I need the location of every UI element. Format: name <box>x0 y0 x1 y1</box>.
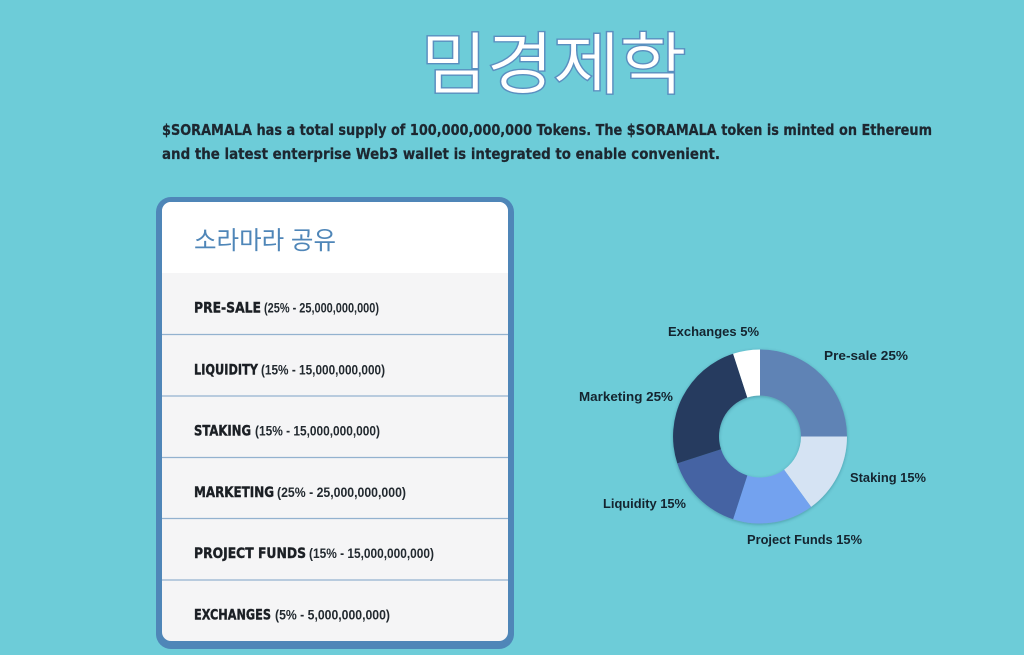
panel: supply table <box>156 197 514 649</box>
row: liquidity <box>194 362 385 378</box>
title: 밈경제학 <box>421 11 686 108</box>
row: exchanges: EXCHANGES <box>194 608 271 624</box>
row: staking: STAKING <box>194 424 251 440</box>
title: 밈경제학 <box>421 11 686 108</box>
slice: pre-sale 25% <box>760 350 847 436</box>
slice: marketing 25% <box>673 354 747 463</box>
row: liquidity: (15% - 15,000,000,000) <box>261 362 385 378</box>
row: marketing: MARKETING <box>194 485 274 501</box>
row: staking <box>194 422 380 440</box>
row: project funds <box>194 545 434 562</box>
label: staking: Staking 15% <box>850 470 926 485</box>
panel header <box>162 202 508 273</box>
row: project funds: PROJECT FUNDS <box>194 546 306 562</box>
donut chart <box>673 350 847 523</box>
intro text: and the latest enterprise Web3 wallet is integrated to enable convenient. <box>162 145 720 163</box>
slice: staking 15% <box>784 436 847 507</box>
label: project funds: Project Funds 15% <box>747 532 862 547</box>
slice: exchanges 5% <box>733 350 760 398</box>
row: marketing <box>194 484 406 501</box>
label: exchanges: Exchanges 5% <box>668 324 759 339</box>
row: pre-sale: (25% - 25,000,000,000) <box>264 300 379 316</box>
panel interior <box>162 202 508 641</box>
slice: liquidity 15% <box>677 449 747 519</box>
row: exchanges: (5% - 5,000,000,000) <box>275 606 390 622</box>
row: marketing: (25% - 25,000,000,000) <box>277 484 406 500</box>
slice: project funds 15% <box>733 470 811 523</box>
panel frame <box>156 197 514 649</box>
row: pre-sale: PRE-SALE <box>194 300 261 316</box>
panel header: 소라마라 공유 <box>194 227 336 255</box>
label: marketing: Marketing 25% <box>579 389 673 404</box>
row: staking: (15% - 15,000,000,000) <box>255 422 380 438</box>
label: pre-sale: Pre-sale 25% <box>824 348 908 363</box>
intro text <box>162 121 932 163</box>
row: exchanges <box>194 606 390 624</box>
row: project funds: (15% - 15,000,000,000) <box>309 545 434 561</box>
row: pre-sale <box>194 300 379 316</box>
label: liquidity: Liquidity 15% <box>603 496 686 511</box>
row: liquidity: LIQUIDITY <box>194 362 259 378</box>
